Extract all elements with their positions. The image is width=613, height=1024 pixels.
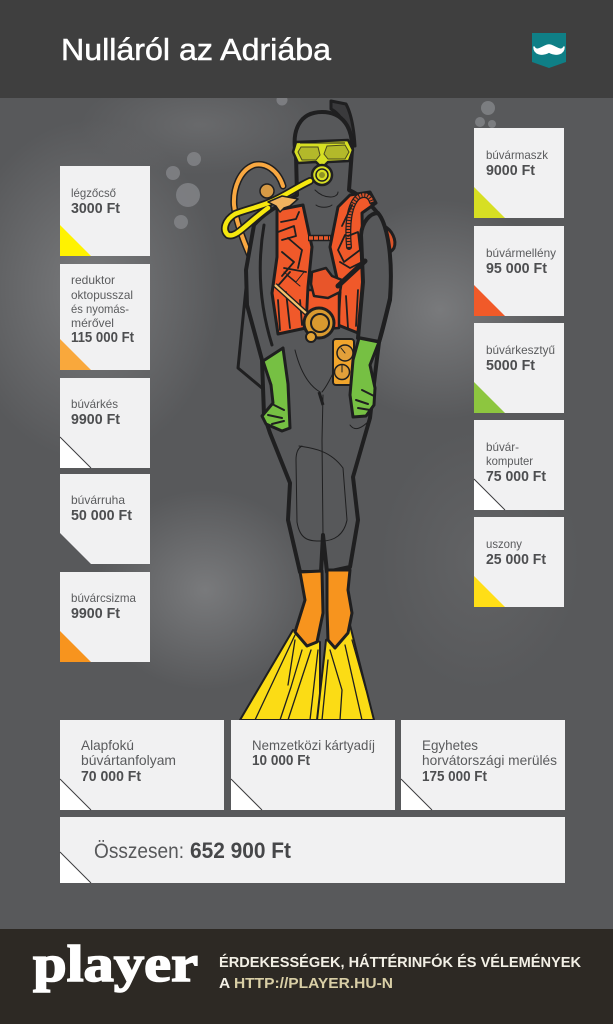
panel: uszony: 25 000 Ft xyxy=(486,552,546,568)
left fin xyxy=(240,630,320,720)
panel: kártyadíj xyxy=(231,720,395,810)
suit folds xyxy=(295,190,370,541)
panel: total xyxy=(60,817,565,883)
panel: alapfokú tanfolyam: búvártanfolyam xyxy=(81,752,176,768)
vest details xyxy=(276,205,362,330)
orange vest right xyxy=(330,192,376,333)
panel: búvármellény: 95 000 Ft xyxy=(486,261,547,277)
panel: búvárcsizma: búvárcsizma xyxy=(71,591,136,605)
chest strap xyxy=(308,235,331,241)
panel: búvárkomputer xyxy=(474,420,564,510)
panel: búvármellény: búvármellény xyxy=(486,246,556,260)
panel: búvárkés: 9900 Ft xyxy=(71,412,120,428)
panel: búvárkomputer: búvár- xyxy=(486,440,519,454)
panel: uszony xyxy=(474,517,564,607)
snorkel xyxy=(331,101,355,146)
panel: reduktor: és nyomás- xyxy=(71,302,129,316)
diver illustration xyxy=(225,101,395,720)
panel: alapfokú tanfolyam: 70 000 Ft xyxy=(81,769,141,785)
panel: uszony: uszony xyxy=(486,537,522,551)
panel: búvárkés: búvárkés xyxy=(71,397,118,411)
panel: búvármellény xyxy=(474,226,564,316)
right boot xyxy=(327,570,352,648)
pressure gauges xyxy=(333,339,354,385)
header bar xyxy=(0,0,613,98)
panel: kártyadíj: Nemzetközi kártyadíj xyxy=(252,737,375,753)
panel: merülés: 175 000 Ft xyxy=(422,769,487,785)
panel: búvárruha xyxy=(60,474,150,564)
panel: búvárkés xyxy=(60,378,150,468)
panel: reduktor xyxy=(60,264,150,370)
corrugated hose on vest xyxy=(348,195,372,247)
regulator mouthpiece xyxy=(312,165,332,185)
panel: búvárkomputer: komputer xyxy=(486,454,533,468)
left arm outline detail xyxy=(260,225,272,345)
panel: légzőcső xyxy=(60,166,150,256)
panel: alapfokú tanfolyam xyxy=(60,720,224,810)
panel: búvárkesztyű xyxy=(474,323,564,413)
bubbles xyxy=(166,94,496,229)
mask xyxy=(293,140,353,168)
buckle xyxy=(311,268,342,298)
panel: total: 652 900 Ft xyxy=(190,838,292,863)
panel: total: Összesen: xyxy=(94,840,184,863)
footer tagline: ÉRDEKESSÉGEK, HÁTTÉRINFÓK ÉS VÉLEMÉNYEK xyxy=(219,953,581,971)
panel: búvárkesztyű: 5000 Ft xyxy=(486,358,535,374)
panel: merülés xyxy=(401,720,565,810)
vest back lump xyxy=(384,226,395,252)
panel: kártyadíj: 10 000 Ft xyxy=(252,753,310,769)
footer link: A HTTP://PLAYER.HU-N xyxy=(219,975,393,992)
tan hose xyxy=(275,285,307,314)
orange vest left xyxy=(272,205,312,334)
panel: búvármaszk: búvármaszk xyxy=(486,148,549,162)
panel: reduktor: oktopusszal xyxy=(71,288,133,302)
vest centre panel xyxy=(306,290,339,330)
panel: búvárkesztyű: búvárkesztyű xyxy=(486,343,555,357)
panel: légzőcső: 3000 Ft xyxy=(71,201,120,217)
first stage valve xyxy=(260,184,298,212)
title: Nulláról az Adriába xyxy=(61,32,332,67)
panel: búvárruha: 50 000 Ft xyxy=(71,508,132,524)
panel: reduktor: reduktor xyxy=(71,273,115,287)
panel: búvármaszk: 9000 Ft xyxy=(486,163,535,179)
footer xyxy=(0,929,613,1024)
left boot xyxy=(295,571,323,646)
right fin xyxy=(317,625,374,720)
air tank xyxy=(238,268,275,388)
octopus regulator xyxy=(304,308,334,342)
panel: búvárruha: búvárruha xyxy=(71,493,125,507)
right arm over vest xyxy=(358,213,391,342)
icon: moustache badge xyxy=(532,33,566,68)
logo: player: player xyxy=(33,936,198,993)
body suit xyxy=(246,112,391,572)
panel: légzőcső: légzőcső xyxy=(71,186,116,200)
left glove xyxy=(262,348,290,431)
orange hose xyxy=(234,164,283,256)
panel: búvárcsizma xyxy=(60,572,150,662)
right glove xyxy=(350,338,379,417)
panel: merülés: Egyhetes xyxy=(422,737,478,753)
panel: búvárkomputer: 75 000 Ft xyxy=(486,469,546,485)
panel: reduktor: mérővel xyxy=(71,316,114,330)
panel: merülés: horvátországi merülés xyxy=(422,752,557,768)
panel: búvárcsizma: 9900 Ft xyxy=(71,606,120,622)
panel: alapfokú tanfolyam: Alapfokú xyxy=(81,737,134,753)
yellow hose xyxy=(225,181,310,235)
panel: búvármaszk xyxy=(474,128,564,218)
panel: reduktor: 115 000 Ft xyxy=(71,330,134,346)
